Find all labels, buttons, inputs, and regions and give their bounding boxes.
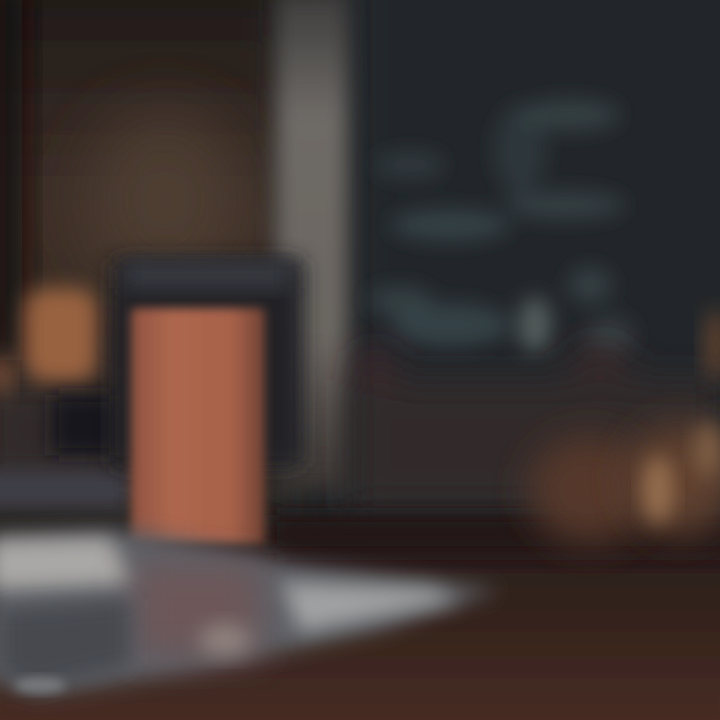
baskets at right xyxy=(528,309,720,544)
pillar xyxy=(276,0,348,490)
copper cylinder xyxy=(131,308,265,544)
chalkboard glows xyxy=(368,99,634,353)
dark band behind table edge xyxy=(270,515,720,553)
lower shelf band xyxy=(350,348,720,510)
lamp xyxy=(0,288,117,480)
wood table xyxy=(0,530,720,720)
left shelf xyxy=(0,470,130,508)
paper on table xyxy=(0,530,500,695)
dark frame xyxy=(112,258,304,468)
